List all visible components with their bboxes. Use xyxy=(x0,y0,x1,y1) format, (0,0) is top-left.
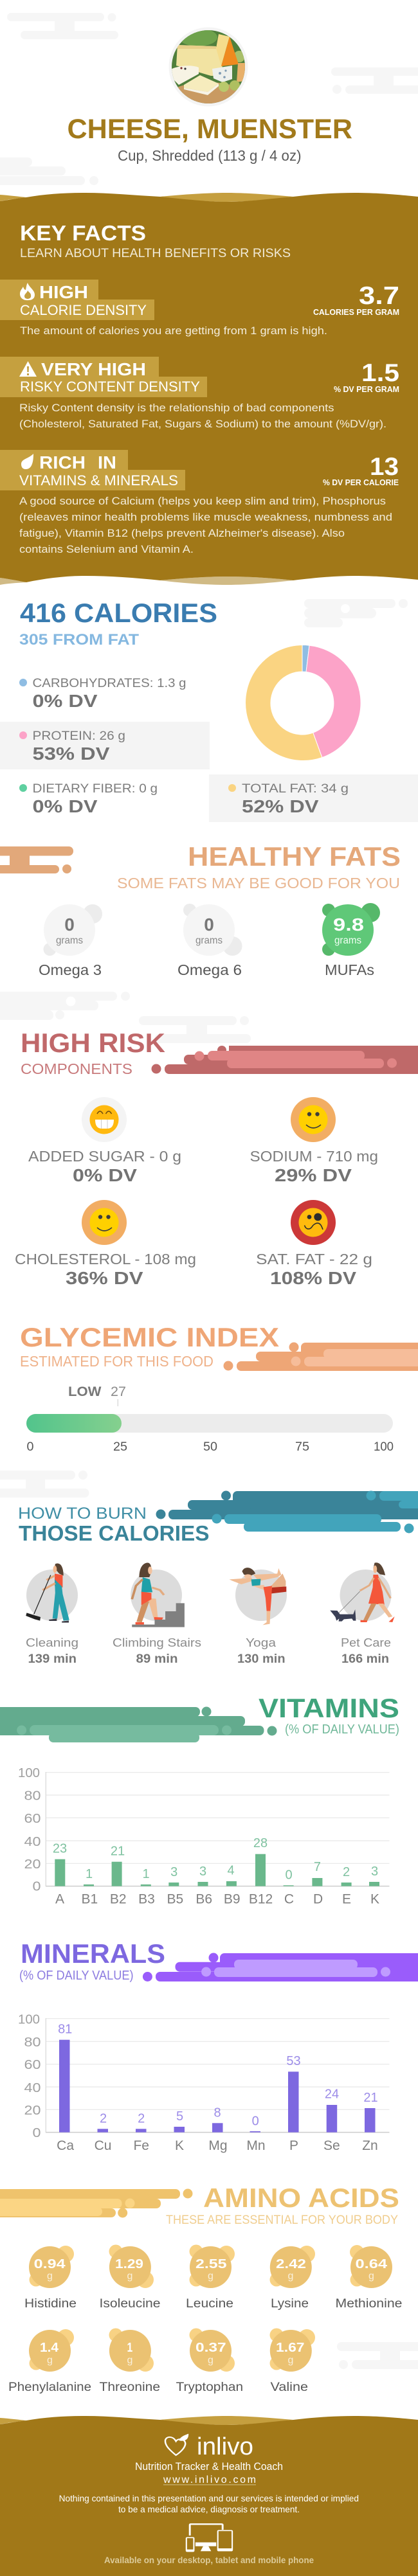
panel: calorie density: CALORIE DENSITY xyxy=(20,302,147,318)
activity: pet care: Pet Care xyxy=(341,1636,391,1649)
decorative shape: healthy fats xyxy=(0,846,73,873)
bar chart: minerals: 24 xyxy=(325,2088,339,2102)
decorative shape: minerals xyxy=(143,1953,418,1981)
bar chart: vitamins: 3 xyxy=(371,1865,378,1879)
activity: cleaning: Cleaning xyxy=(26,1636,78,1649)
panel: calorie density: HIGH xyxy=(39,282,88,302)
panel: rich in vitamins and minerals: A good source of Calcium (helps you keep slim and trim), Phosphorus xyxy=(19,495,386,507)
bar chart: minerals: Se xyxy=(323,2138,340,2153)
amino acid: tryptophan: 0.37 xyxy=(195,2341,226,2355)
tagline: Nutrition Tracker & Health Coach xyxy=(135,2460,283,2473)
amino acid: leucine: g xyxy=(208,2271,214,2282)
panel: risky content density: (Cholesterol, Saturated Fat, Sugars & Sodium) to the amount (%DV/gr). xyxy=(19,418,386,430)
healthy fat: omega 3: grams xyxy=(56,935,83,946)
decorative shape: vitamins xyxy=(0,1707,277,1742)
activity: climbing stairs xyxy=(113,1563,201,1666)
panel: calorie density xyxy=(0,280,399,337)
amino acid: tryptophan: g xyxy=(208,2355,214,2366)
burn heading line two: THOSE CALORIES xyxy=(19,1521,210,1545)
vitamins heading: VITAMINS xyxy=(259,1693,399,1723)
bar chart: vitamins: K xyxy=(370,1892,379,1907)
donut chart: macronutrients xyxy=(246,645,361,760)
bar chart: vitamins: 0 xyxy=(32,1880,41,1894)
bar chart: vitamins: E xyxy=(342,1892,351,1907)
bar chart: minerals: Mg xyxy=(208,2138,228,2153)
calories heading: 416 CALORIES xyxy=(20,598,217,628)
burn heading line one: HOW TO BURN xyxy=(18,1505,147,1523)
panel: rich in vitamins and minerals xyxy=(0,450,399,555)
bar chart: minerals: 100 xyxy=(18,2012,40,2026)
healthy fats subheading: SOME FATS MAY BE GOOD FOR YOU xyxy=(117,875,400,891)
bar chart: minerals: 81 xyxy=(58,2022,72,2036)
legend: protein: 53% DV xyxy=(32,744,110,764)
key facts wave band xyxy=(0,193,418,585)
amino acid: leucine: 2.55 xyxy=(195,2257,226,2271)
high risk subheading: COMPONENTS xyxy=(21,1060,132,1077)
amino acid: lysine: g xyxy=(288,2271,293,2282)
activity: cleaning xyxy=(26,1563,78,1666)
healthy fat: omega 6 xyxy=(177,904,242,978)
decorative shape: burn calories xyxy=(156,1491,418,1534)
healthy fat: omega 6: 0 xyxy=(204,915,214,935)
background cloud: top right xyxy=(331,67,418,94)
bar chart: vitamins: 4 xyxy=(227,1864,235,1878)
risk item: sodium: 29% DV xyxy=(275,1165,352,1185)
amino acid: leucine: Leucine xyxy=(186,2297,233,2311)
amino acid: methionine: Methionine xyxy=(336,2297,403,2311)
panel: rich in vitamins and minerals: RICH xyxy=(39,452,86,472)
amino acid: threonine xyxy=(99,2328,160,2394)
amino acid: phenylalanine: 1.4 xyxy=(40,2341,59,2355)
risk item: added sugar: 0% DV xyxy=(73,1165,137,1185)
healthy fat: omega 6: Omega 6 xyxy=(177,962,242,978)
calories from fat: 305 FROM FAT xyxy=(19,631,139,648)
decorative shape: glycemic index xyxy=(224,1342,418,1371)
amino acid: lysine xyxy=(270,2246,315,2311)
amino acid: isoleucine: g xyxy=(127,2271,132,2282)
glycemic value label: LOW xyxy=(68,1384,102,1399)
healthy fat: MUFAs: grams xyxy=(334,935,361,946)
healthy fat: MUFAs: 9.8 xyxy=(333,915,364,935)
footer wave band xyxy=(0,2416,418,2576)
bar chart: vitamins: B9 xyxy=(224,1892,241,1907)
bar chart: minerals xyxy=(18,2012,390,2153)
bar chart: minerals: 8 xyxy=(214,2106,221,2120)
activity: pet care: 166 min xyxy=(341,1652,389,1666)
bar chart: vitamins: 0 xyxy=(285,1868,293,1883)
activity: climbing stairs: Climbing Stairs xyxy=(113,1636,201,1649)
bar chart: minerals: K xyxy=(175,2138,184,2153)
bar chart: vitamins xyxy=(18,1766,390,1907)
risk item: sodium: SODIUM - 710 mg xyxy=(250,1148,378,1165)
glycemic index bar: 50 xyxy=(203,1440,217,1454)
bar chart: vitamins: 21 xyxy=(111,1845,125,1859)
bar chart: minerals: 5 xyxy=(176,2109,183,2124)
amino acid: histidine: 0.94 xyxy=(34,2257,66,2271)
risk item: cholesterol xyxy=(15,1200,196,1288)
risk item: added sugar xyxy=(28,1097,181,1185)
glycemic index bar xyxy=(26,1414,394,1454)
panel: calorie density: CALORIES PER GRAM xyxy=(313,307,399,317)
risk item: saturated fat: 108% DV xyxy=(270,1268,356,1288)
legend: protein xyxy=(0,722,210,769)
bar chart: vitamins: D xyxy=(313,1892,323,1907)
bar chart: vitamins: A xyxy=(55,1892,64,1907)
glycemic index bar: 0 xyxy=(27,1440,33,1454)
panel: calorie density: 3.7 xyxy=(359,282,399,310)
amino acid: threonine: Threonine xyxy=(99,2381,160,2394)
bar chart: minerals: 2 xyxy=(100,2111,107,2125)
bar chart: vitamins: 7 xyxy=(314,1860,321,1874)
amino acid: methionine: g xyxy=(368,2271,374,2282)
panel: rich in vitamins and minerals: fatigue), Vitamin B12 (helps prevent Alzheimer's disease). Also xyxy=(19,527,345,539)
amino acid: leucine xyxy=(186,2244,235,2311)
legend: dietary fiber: 0% DV xyxy=(32,796,98,816)
glycemic index bar: 100 xyxy=(374,1440,394,1454)
glycemic index subheading: ESTIMATED FOR THIS FOOD xyxy=(20,1353,214,1370)
legend: carbohydrates: 0% DV xyxy=(32,691,98,711)
minerals subheading: (% OF DAILY VALUE) xyxy=(19,1969,134,1983)
panel: calorie density: The amount of calories you are getting from 1 gram is high. xyxy=(20,325,327,337)
availability note: Available on your desktop, tablet and mobile phone xyxy=(104,2555,314,2565)
bar chart: minerals: 2 xyxy=(138,2111,145,2125)
bar chart: minerals: P xyxy=(289,2138,298,2153)
legend: total fat: 52% DV xyxy=(242,796,319,816)
glycemic index bar: 25 xyxy=(113,1440,127,1454)
food photo: cheese board xyxy=(168,27,248,107)
bar chart: vitamins: B1 xyxy=(81,1892,98,1907)
risk item: cholesterol: CHOLESTEROL - 108 mg xyxy=(15,1251,196,1267)
bar chart: vitamins: 2 xyxy=(343,1865,350,1879)
amino acid: phenylalanine xyxy=(8,2329,91,2394)
bar chart: minerals: 53 xyxy=(286,2054,301,2068)
panel: risky content density: % DV PER GRAM xyxy=(334,384,399,394)
bar chart: vitamins: B5 xyxy=(167,1892,183,1907)
glycemic index bar: 75 xyxy=(295,1440,309,1454)
panel: rich in vitamins and minerals: contains Selenium and Vitamin A. xyxy=(19,543,194,555)
bar chart: vitamins: 3 xyxy=(199,1865,206,1879)
bar chart: minerals: Ca xyxy=(57,2138,74,2153)
bar chart: vitamins: 60 xyxy=(24,1812,41,1826)
risk item: saturated fat xyxy=(256,1200,372,1288)
bar chart: minerals: 0 xyxy=(252,2115,259,2129)
website link: www.inlivo.com xyxy=(163,2474,256,2485)
bar chart: vitamins: 1 xyxy=(86,1867,93,1881)
bar chart: minerals: 40 xyxy=(24,2081,41,2095)
bar chart: vitamins: B3 xyxy=(138,1892,155,1907)
activity: yoga: Yoga xyxy=(246,1636,277,1649)
legend: dietary fiber: DIETARY FIBER: 0 g xyxy=(32,782,158,796)
background cloud: top left xyxy=(7,13,118,39)
amino acid: histidine xyxy=(24,2246,77,2311)
amino acid: threonine: g xyxy=(127,2355,132,2366)
amino acid: isoleucine: Isoleucine xyxy=(99,2297,161,2311)
icon: warning triangle xyxy=(19,361,37,377)
activity: yoga xyxy=(230,1568,287,1666)
legend: protein: PROTEIN: 26 g xyxy=(32,729,125,743)
bar chart: vitamins: 1 xyxy=(142,1867,150,1881)
bar chart: vitamins: 23 xyxy=(53,1842,67,1856)
panel: risky content density: Risky Content density is the relationship of bad components xyxy=(19,402,334,414)
disclaimer: Nothing contained in this presentation and our services is intended or implied xyxy=(59,2493,359,2503)
panel: rich in vitamins and minerals: 13 xyxy=(370,453,399,481)
risk item: saturated fat: SAT. FAT - 22 g xyxy=(256,1251,372,1267)
amino acid: tryptophan: Tryptophan xyxy=(176,2381,243,2394)
bar chart: vitamins: 3 xyxy=(170,1865,177,1879)
bar chart: vitamins: C xyxy=(284,1892,294,1907)
amino acid: tryptophan xyxy=(176,2328,243,2394)
healthy fat: omega 3 xyxy=(39,904,102,978)
bar chart: vitamins: 20 xyxy=(24,1857,41,1872)
risk item: sodium xyxy=(250,1097,378,1185)
background cloud: left of high risk xyxy=(0,992,130,1020)
activity: cleaning: 139 min xyxy=(28,1652,77,1666)
background cloud: calories xyxy=(304,599,408,627)
panel: risky content density: 1.5 xyxy=(361,359,399,387)
decorative shape: amino acids xyxy=(0,2189,193,2217)
bar chart: vitamins: 80 xyxy=(24,1789,41,1803)
key facts subheading: LEARN ABOUT HEALTH BENEFITS OR RISKS xyxy=(20,246,291,260)
risk item: added sugar: ADDED SUGAR - 0 g xyxy=(28,1148,181,1165)
background cloud: amino acids xyxy=(337,2342,418,2369)
panel: rich in vitamins and minerals: IN xyxy=(98,452,116,472)
bar chart: minerals: Cu xyxy=(95,2138,111,2153)
bar chart: minerals: 80 xyxy=(24,2035,41,2050)
healthy fat: omega 3: 0 xyxy=(64,915,75,935)
bar chart: minerals: Fe xyxy=(133,2138,149,2153)
bar chart: minerals: Zn xyxy=(362,2138,378,2153)
amino acids heading: AMINO ACIDS xyxy=(203,2183,399,2213)
amino acid: isoleucine: 1.29 xyxy=(115,2257,143,2271)
activity: pet care xyxy=(330,1562,395,1666)
glycemic value label: 27 xyxy=(111,1384,126,1399)
legend: carbohydrates xyxy=(19,677,186,711)
panel: rich in vitamins and minerals: (releaves minor health problems like muscle weakness, numbness and xyxy=(19,511,392,523)
amino acid: phenylalanine: g xyxy=(47,2355,53,2366)
healthy fat: MUFAs: MUFAs xyxy=(325,962,374,978)
glycemic index heading: GLYCEMIC INDEX xyxy=(20,1322,279,1352)
risk item: cholesterol: 36% DV xyxy=(66,1268,143,1288)
icon: leaf xyxy=(21,454,33,469)
panel: risky content density xyxy=(0,357,399,430)
logo: inlivo xyxy=(165,2433,253,2460)
amino acid: valine: Valine xyxy=(270,2381,308,2394)
amino acid: valine: 1.67 xyxy=(276,2341,305,2355)
amino acid: threonine: 1 xyxy=(127,2341,132,2355)
amino acid: histidine: Histidine xyxy=(24,2297,77,2311)
panel: risky content density: RISKY CONTENT DENSITY xyxy=(20,379,200,395)
bar chart: vitamins: B2 xyxy=(110,1892,127,1907)
decorative shape: high risk xyxy=(152,1046,418,1074)
bar chart: vitamins: B12 xyxy=(249,1892,273,1907)
healthy fat: omega 6: grams xyxy=(195,935,223,946)
serving size subtitle: Cup, Shredded (113 g / 4 oz) xyxy=(118,147,301,164)
icon: flame xyxy=(20,283,35,300)
amino acid: valine: g xyxy=(288,2355,293,2366)
bar chart: vitamins: 40 xyxy=(24,1835,41,1849)
icon: devices xyxy=(186,2524,232,2552)
legend: dietary fiber xyxy=(19,782,158,816)
bar chart: vitamins: 100 xyxy=(18,1766,40,1780)
healthy fats heading: HEALTHY FATS xyxy=(188,841,401,872)
amino acid: valine xyxy=(270,2328,315,2394)
amino acid: lysine: Lysine xyxy=(271,2297,309,2311)
bar chart: vitamins: 28 xyxy=(253,1836,268,1850)
panel: risky content density: VERY HIGH xyxy=(41,359,146,379)
vitamins subheading: (% OF DAILY VALUE) xyxy=(285,1722,399,1737)
bar chart: minerals: Mn xyxy=(246,2138,266,2153)
activity: climbing stairs: 89 min xyxy=(136,1652,177,1666)
panel: rich in vitamins and minerals: VITAMINS & MINERALS xyxy=(19,472,178,488)
high risk heading: HIGH RISK xyxy=(21,1028,165,1058)
amino acid: isoleucine xyxy=(99,2244,161,2311)
logo: inlivo: inlivo xyxy=(197,2433,253,2460)
disclaimer xyxy=(59,2493,359,2514)
bar chart: minerals: 60 xyxy=(24,2058,41,2072)
key facts heading: KEY FACTS xyxy=(20,221,146,245)
panel: rich in vitamins and minerals: % DV PER CALORIE xyxy=(323,478,399,487)
amino acid: histidine: g xyxy=(47,2271,53,2282)
legend: carbohydrates: CARBOHYDRATES: 1.3 g xyxy=(32,677,186,690)
healthy fat: omega 3: Omega 3 xyxy=(39,962,102,978)
legend: total fat xyxy=(209,774,418,822)
amino acid: lysine: 2.42 xyxy=(276,2257,306,2271)
amino acid: methionine xyxy=(336,2245,403,2311)
legend: total fat: TOTAL FAT: 34 g xyxy=(242,782,349,796)
bar chart: minerals: 0 xyxy=(32,2126,41,2140)
amino acids subheading: THESE ARE ESSENTIAL FOR YOUR BODY xyxy=(166,2213,398,2227)
activity: yoga: 130 min xyxy=(237,1652,286,1666)
background cloud: lower left xyxy=(0,157,98,185)
minerals heading: MINERALS xyxy=(21,1938,165,1969)
bar chart: minerals: 20 xyxy=(24,2104,41,2118)
background cloud: centre of high risk xyxy=(139,1016,251,1043)
amino acid: methionine: 0.64 xyxy=(355,2257,388,2271)
glycemic value label xyxy=(68,1384,126,1406)
background cloud: burn xyxy=(0,1471,89,1498)
bar chart: minerals: 21 xyxy=(363,2091,378,2105)
healthy fat: MUFAs xyxy=(322,903,380,978)
amino acid: phenylalanine: Phenylalanine xyxy=(8,2381,91,2394)
bar chart: vitamins: B6 xyxy=(195,1892,212,1907)
title: CHEESE, MUENSTER xyxy=(67,114,352,145)
disclaimer: to be a medical advice, diagnosis or treatment. xyxy=(118,2504,300,2514)
